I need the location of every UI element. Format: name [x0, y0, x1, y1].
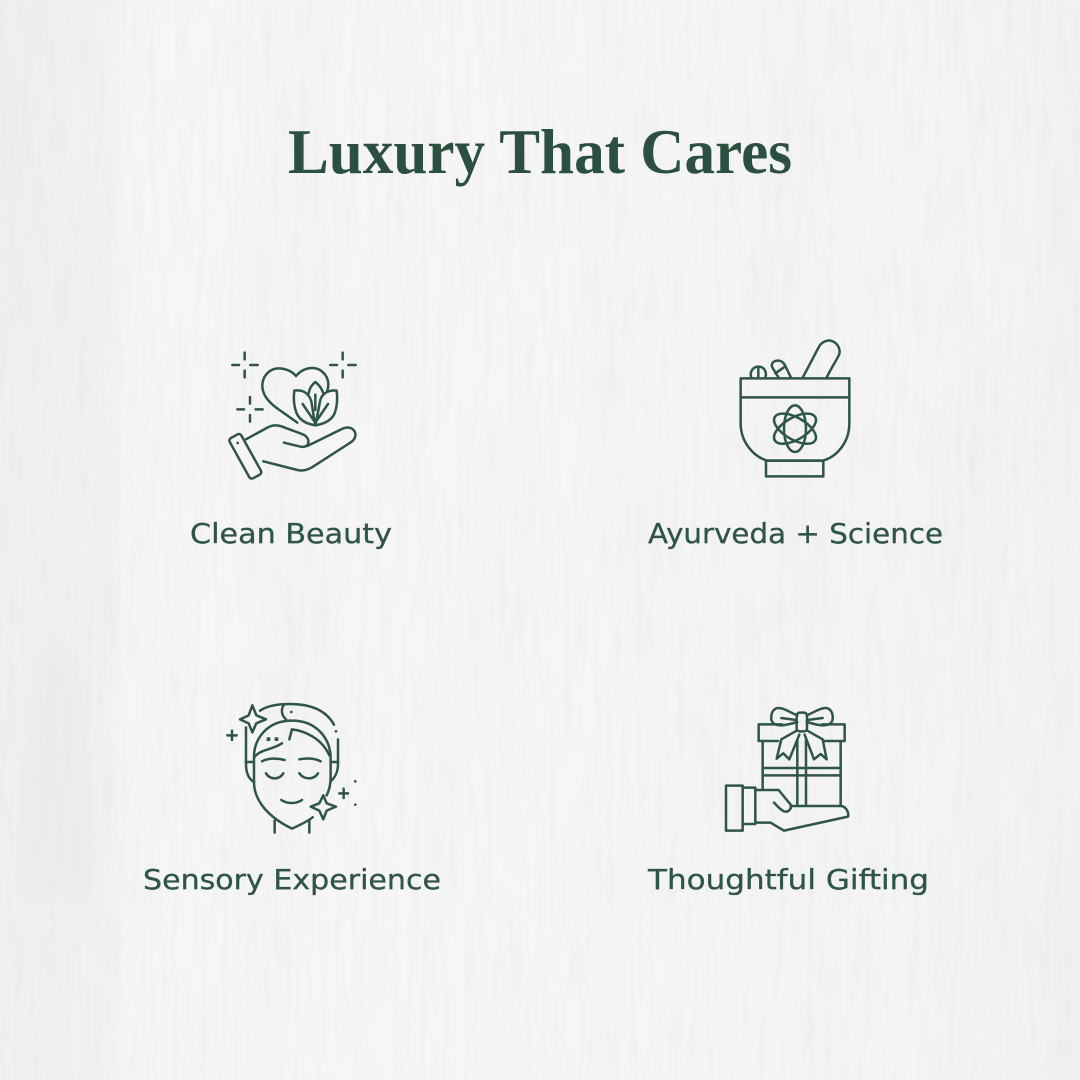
- panel: sensory experience: [143, 704, 441, 896]
- label: Clean Beauty: Clean Beauty: [190, 517, 392, 550]
- panel: thoughtful gifting: [647, 708, 929, 896]
- icon: mortar and pestle with atom: [741, 341, 849, 476]
- panel: ayurveda and science: [648, 341, 943, 550]
- title: Luxury That Cares: [288, 116, 792, 187]
- icon: face with headband and sparkles: [227, 704, 357, 833]
- panel: clean beauty: [190, 353, 392, 550]
- icon: hand holding gift box: [726, 708, 848, 831]
- label: Ayurveda + Science: Ayurveda + Science: [648, 517, 943, 550]
- icon: hand holding heart and leaves: [228, 353, 356, 480]
- label: Thoughtful Gifting: Thoughtful Gifting: [647, 863, 929, 896]
- label: Sensory Experience: Sensory Experience: [143, 863, 441, 896]
